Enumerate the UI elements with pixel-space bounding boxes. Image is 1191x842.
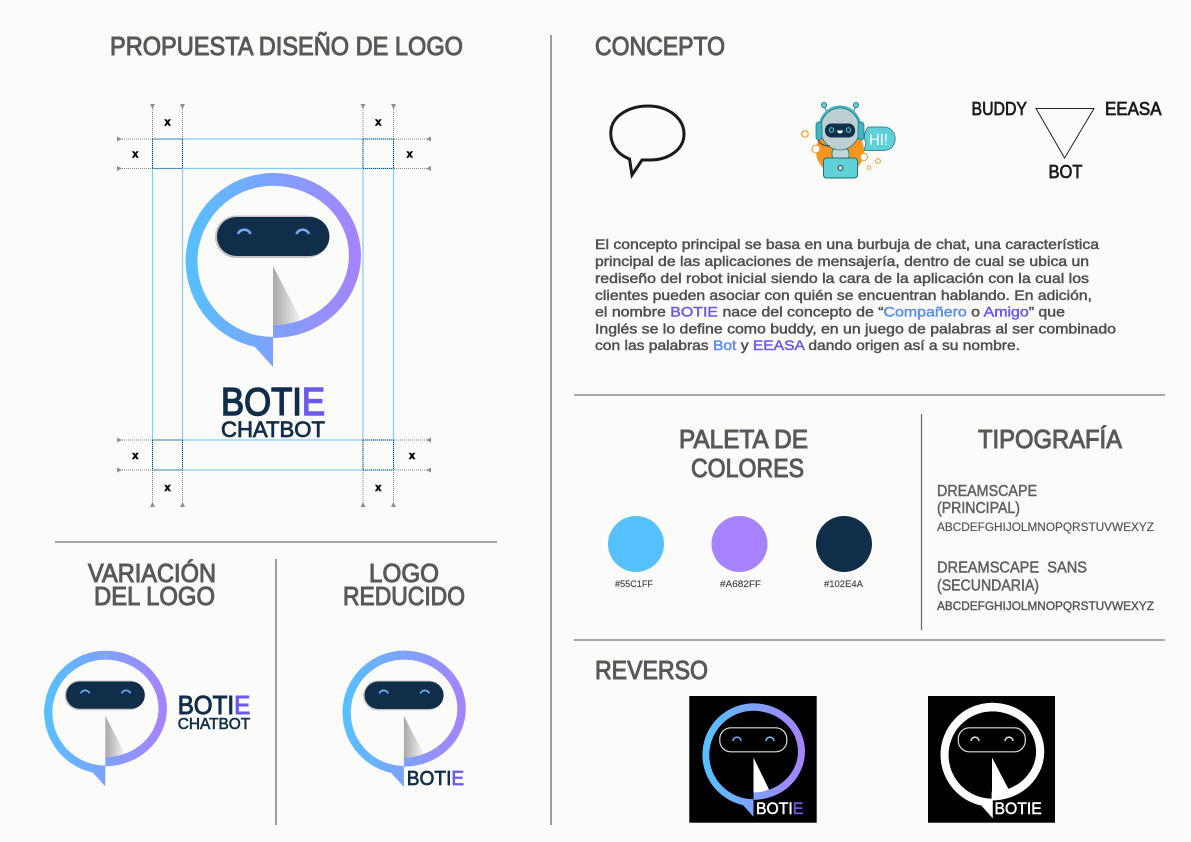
panel: construction guides: x [375,482,382,494]
logo: main bubble [186,173,361,367]
swatch: purple [712,516,768,589]
text block: concept description: rediseño del robot inicial siendo la cara de la aplicación con la cual los [595,271,1089,286]
diagram: buddy eeasa bot triangle: EEASA [1105,99,1162,119]
panel: reverse logo white: BOTIE [994,799,1042,818]
text block: concept description: clientes pueden asociar con quién se encuentran hablando. En adición, [595,288,1092,303]
logo reduced [343,651,466,790]
swatch: purple: #A682FF [720,579,762,589]
text block: concept description: el nombre BOTIE nace del concepto de “ Compañero o Amigo ” que [595,304,1065,320]
text block: concept description: con las palabras Bot y EEASA dando origen así a su nombre. [595,338,1020,353]
icon: robot with laptop: HI! [869,132,888,149]
panel: construction guides: x [164,116,171,128]
text block: primary typeface: (PRINCIPAL) [937,500,1020,517]
heading: reverso: REVERSO [595,657,708,685]
logo wordmark: BOTIE CHATBOT: BOTIE [221,381,325,424]
text block: secondary typeface: ABCDEFGHIJOLMNOPQRSTUVWEXYZ [937,601,1154,613]
swatch: navy [816,516,872,589]
diagram: buddy eeasa bot triangle: BOT [1048,162,1082,182]
text block: concept description: principal de las aplicaciones de mensajería, dentro de cual se ubica un [595,254,1089,269]
logo variation: horizontal: CHATBOT [178,716,250,733]
panel: construction guides: x [409,450,416,462]
text block: concept description: Inglés se lo define como buddy, en un juego de palabras al ser combinado [595,322,1116,336]
logo wordmark: BOTIE CHATBOT [221,381,325,442]
icon: chat bubble [611,106,684,175]
panel: construction guides: x [407,148,414,160]
heading: logo reducido: REDUCIDO [343,583,465,611]
text block: concept description [595,237,1116,353]
logo wordmark: BOTIE CHATBOT: CHATBOT [221,417,325,442]
panel: reverse logo colour [689,696,817,823]
heading: variacion del logo: VARIACIÓN [88,559,216,588]
heading: paleta de colores [679,426,808,483]
panel: construction guides [117,104,431,507]
icon: robot with laptop [802,102,895,178]
text block: primary typeface: ABCDEFGHIJOLMNOPQRSTUVWEXYZ [937,522,1154,534]
panel: construction guides: x [164,482,171,494]
swatch: light blue [608,516,664,589]
text block: secondary typeface [937,560,1154,613]
text block: secondary typeface: DREAMSCAPE SANS [937,560,1087,576]
panel: construction guides: x [375,116,382,128]
heading: variacion del logo: DEL LOGO [94,583,215,611]
panel: reverse logo white [928,696,1055,823]
logo reduced: BOTIE [407,767,464,790]
swatch: light blue: #55C1FF [615,579,653,589]
text block: concept description: El concepto principal se basa en una burbuja de chat, una característica [595,237,1100,252]
text block: primary typeface: DREAMSCAPE [937,483,1037,500]
text block: secondary typeface: (SECUNDARIA) [937,578,1039,594]
title: propuesta de logo: PROPUESTA DISEÑO DE LOGO [110,32,463,61]
swatch: navy: #102E4A [824,579,863,589]
heading: paleta de colores: COLORES [691,455,804,483]
text block: primary typeface [937,483,1154,534]
diagram: buddy eeasa bot triangle [972,99,1162,182]
panel: reverse logo colour: BOTIE [756,799,803,818]
heading: paleta de colores: PALETA DE [679,426,808,454]
panel: construction guides: x [132,450,139,462]
logo variation: horizontal: BOTIE [178,690,250,720]
heading: logo reducido [343,560,465,611]
title: concepto: CONCEPTO [595,33,725,61]
panel: construction guides: x [132,148,139,160]
diagram: buddy eeasa bot triangle: BUDDY [972,99,1027,119]
heading: logo reducido: LOGO [369,560,439,588]
logo variation: horizontal [44,651,250,786]
heading: variacion del logo [88,559,216,611]
heading: tipografia: TIPOGRAFÍA [978,425,1122,454]
